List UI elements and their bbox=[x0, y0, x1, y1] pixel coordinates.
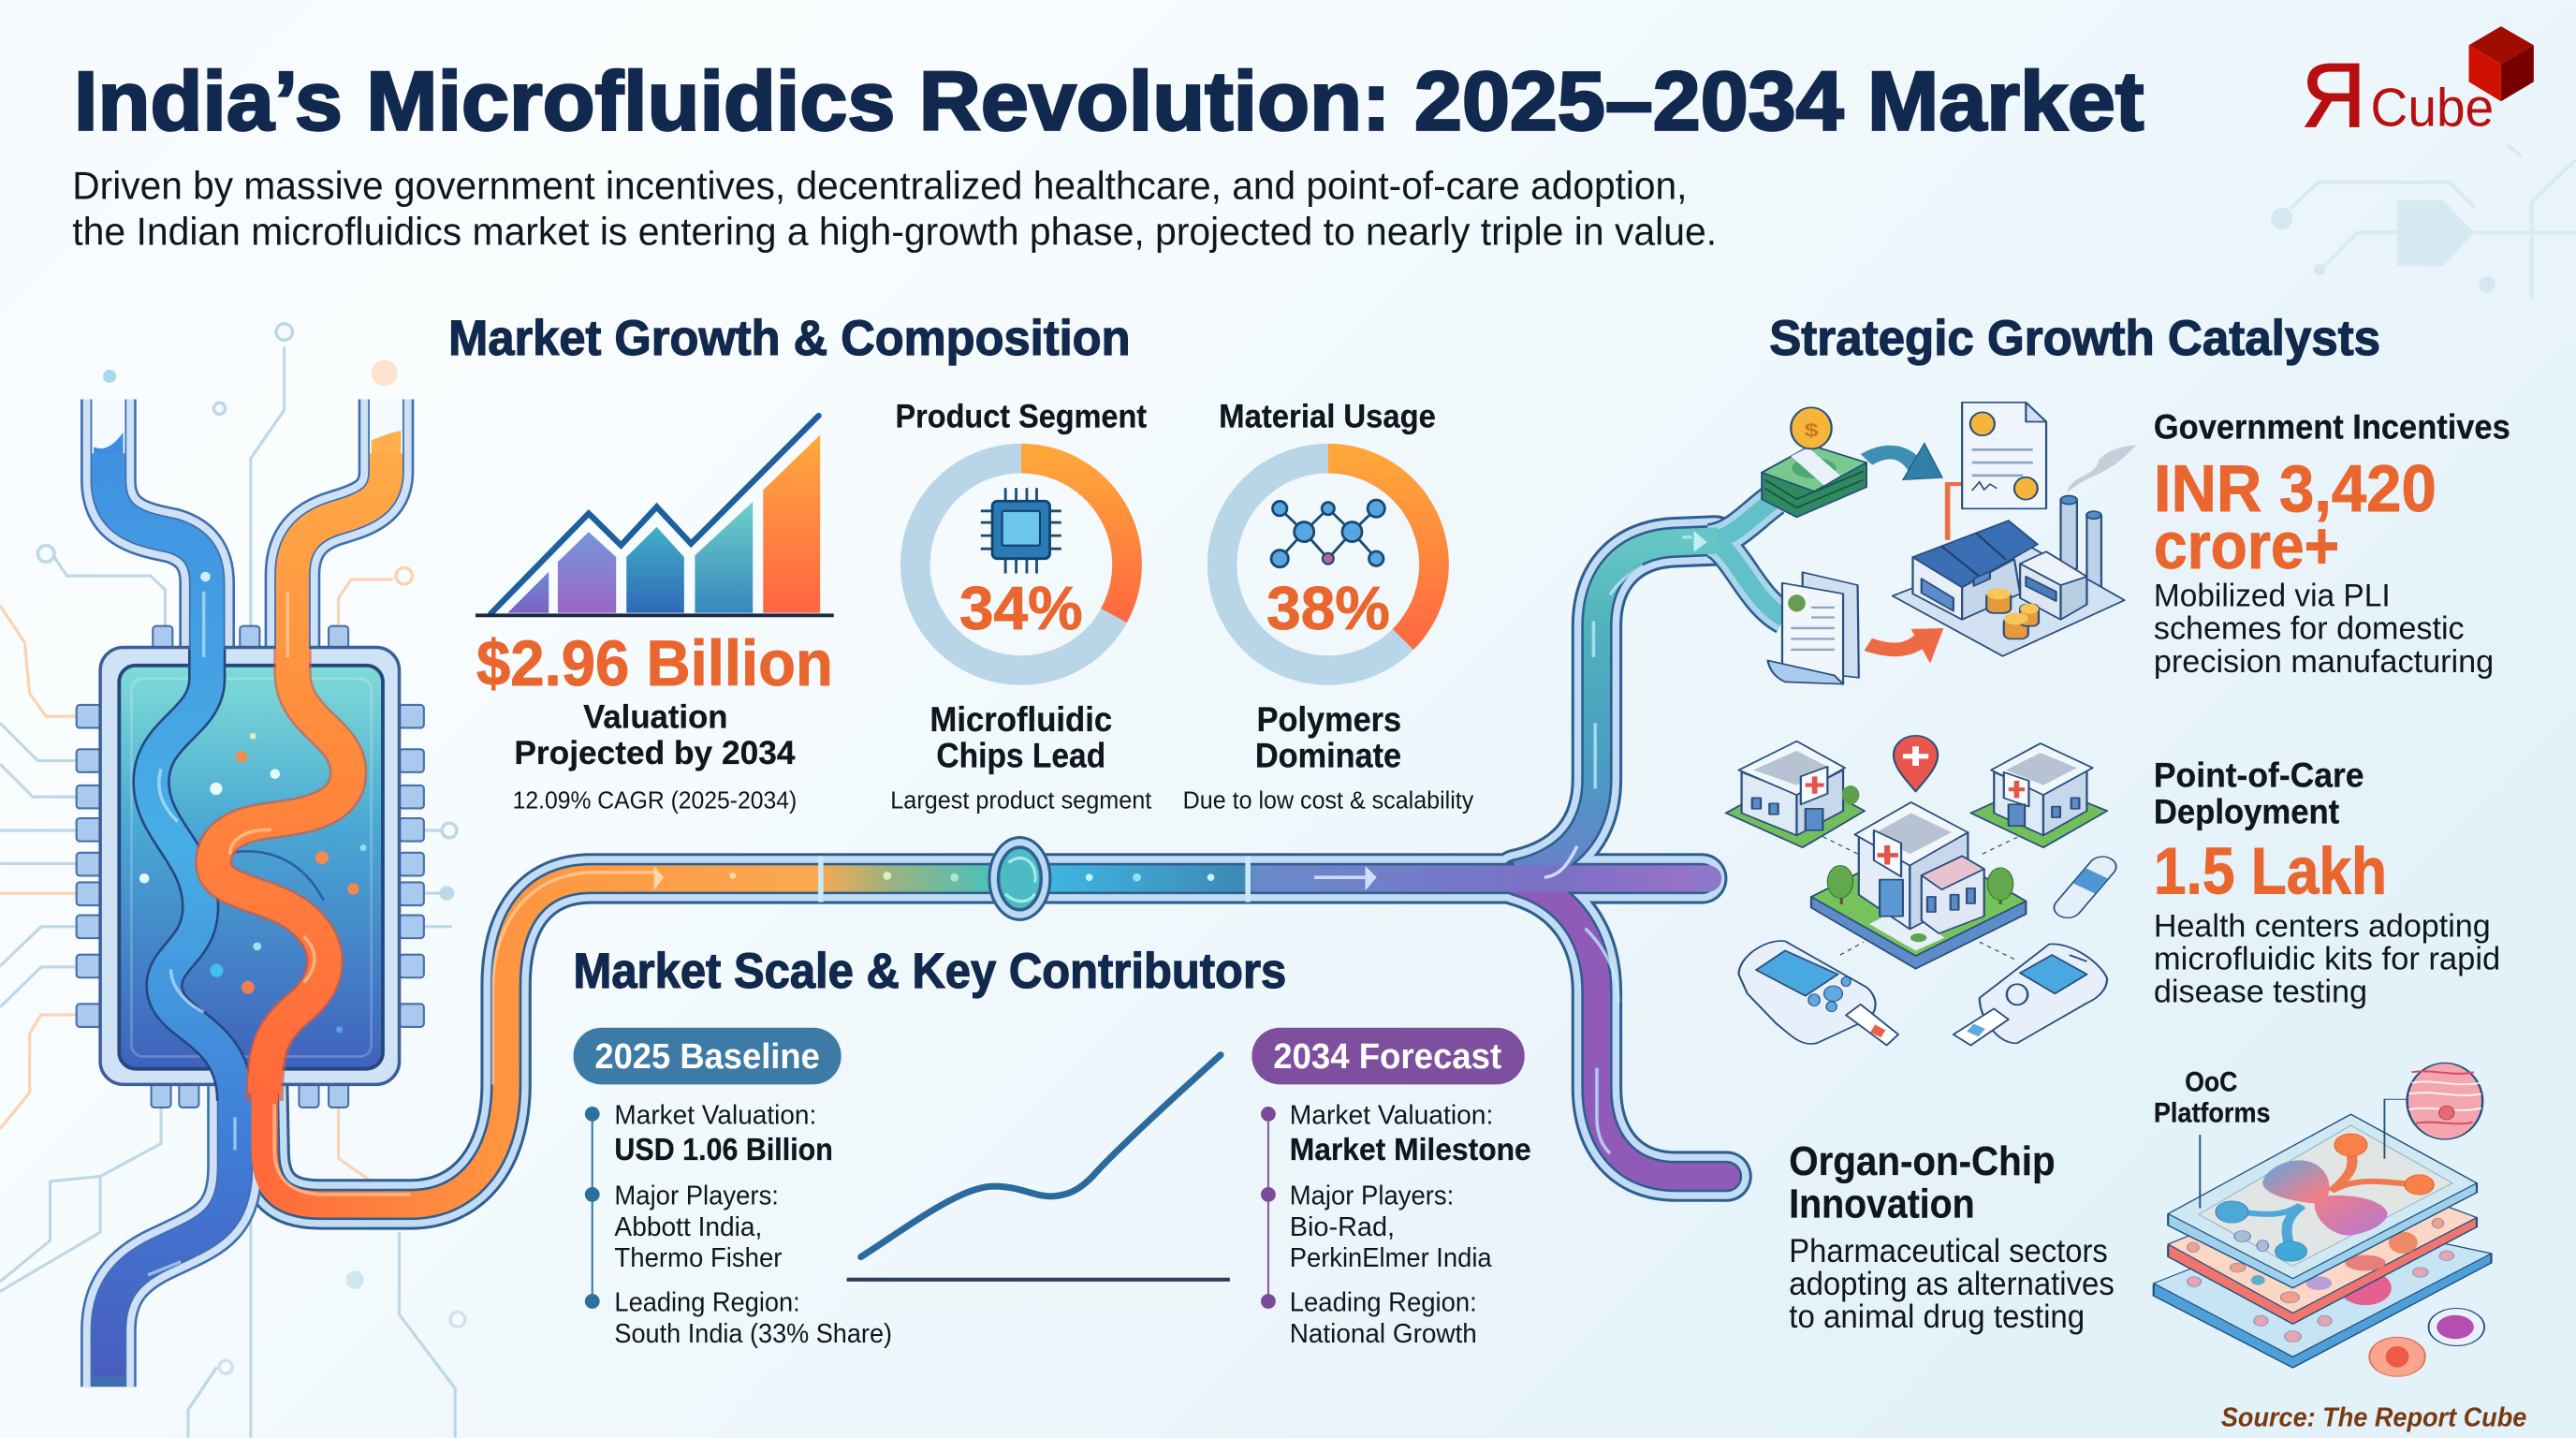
column: 2025 baseline: Leading Region: bbox=[614, 1288, 800, 1318]
right clinic bbox=[1970, 743, 2107, 847]
main channel valve and flow markers bbox=[654, 531, 1707, 1153]
subtitle: the Indian microfluidics market is entering a high-growth phase, projected to nearly triple in value. bbox=[72, 210, 1717, 253]
left inlet and outlet tubes bbox=[109, 399, 386, 1387]
text: organ-on-chip innovation: to animal drug testing bbox=[1789, 1299, 2085, 1335]
text: point-of-care deployment: disease testing bbox=[2154, 975, 2367, 1010]
text: point-of-care deployment: Point-of-Care bbox=[2154, 756, 2364, 795]
logo: Report Cube: Я bbox=[2302, 46, 2365, 146]
column: 2034 forecast: Market Valuation: bbox=[1290, 1100, 1493, 1130]
text: point-of-care deployment: Deployment bbox=[2154, 792, 2339, 830]
column: 2025 baseline: Market Valuation: bbox=[614, 1100, 816, 1130]
text: organ-on-chip innovation: Innovation bbox=[1789, 1181, 1975, 1226]
panel: market growth and composition bbox=[448, 311, 1474, 814]
icon: microchip bbox=[981, 488, 1061, 574]
column: 2034 forecast: PerkinElmer India bbox=[1290, 1243, 1492, 1273]
donut: product segment: Chips Lead bbox=[936, 737, 1105, 775]
bottom layer bbox=[2154, 1218, 2491, 1368]
label: OoC platforms: Platforms bbox=[2154, 1098, 2271, 1129]
icon: point-of-care clinics and devices illustration bbox=[1726, 736, 2107, 1045]
microfluidic chip bbox=[77, 626, 424, 1108]
column: 2034 forecast: National Growth bbox=[1290, 1319, 1477, 1349]
subtitle: Driven by massive government incentives, decentralized healthcare, and point-of-care adoption, bbox=[72, 164, 1687, 207]
donut: material usage: Due to low cost & scalability bbox=[1183, 785, 1474, 814]
label: OoC platforms bbox=[2154, 1066, 2271, 1129]
fork toward incentive icons bbox=[1708, 500, 1784, 618]
top glass layer bbox=[2168, 1114, 2477, 1288]
text: government incentives bbox=[2154, 408, 2510, 680]
left clinic bbox=[1726, 741, 1865, 847]
organ channel bbox=[2216, 1134, 2434, 1261]
column: 2025 baseline bbox=[574, 1028, 892, 1349]
column: 2025 baseline: USD 1.06 Billion bbox=[614, 1133, 833, 1167]
column: 2034 forecast: Market Milestone bbox=[1290, 1133, 1531, 1167]
column: 2025 baseline: Major Players: bbox=[614, 1181, 779, 1211]
donut: material usage: Dominate bbox=[1255, 737, 1401, 775]
middle layer bbox=[2168, 1170, 2477, 1324]
microfluidic pipe network bbox=[263, 500, 1784, 1204]
text: organ-on-chip innovation bbox=[1789, 1138, 2115, 1335]
chart: growth line bbox=[847, 1055, 1230, 1280]
logo: Report Cube bbox=[2302, 26, 2534, 146]
panel: strategic growth catalysts bbox=[1726, 311, 2526, 1432]
title: India’s Microfluidics Revolution: 2025–2034 Market bbox=[74, 54, 2144, 148]
logo: Report Cube: Cube bbox=[2371, 78, 2494, 138]
petri dishes bbox=[2369, 1308, 2484, 1376]
icon: government incentives illustration bbox=[1762, 403, 2136, 684]
subtitle bbox=[72, 164, 1717, 253]
column: 2034 forecast: Leading Region: bbox=[1290, 1288, 1477, 1318]
stat: valuation: $2.96 Billion bbox=[476, 627, 833, 699]
text: point-of-care deployment: Health centers adopting bbox=[2154, 908, 2491, 944]
text: organ-on-chip innovation: Organ-on-Chip bbox=[1789, 1138, 2056, 1184]
donut: product segment: 34% bbox=[959, 574, 1083, 642]
text: point-of-care deployment: microfluidic kits for rapid bbox=[2154, 941, 2500, 976]
text: organ-on-chip innovation: Pharmaceutical sectors bbox=[1789, 1233, 2108, 1269]
test capsule bbox=[2068, 867, 2102, 907]
text: organ-on-chip innovation: adopting as alternatives bbox=[1789, 1266, 2115, 1302]
heading: strategic catalysts: Strategic Growth Catalysts bbox=[1769, 311, 2380, 366]
tissue callout bbox=[2200, 1063, 2482, 1209]
handheld diagnostic left bbox=[1738, 941, 1898, 1045]
panel: market scale and key contributors bbox=[574, 944, 1531, 1349]
donut: material usage: 38% bbox=[1266, 574, 1390, 642]
donut: product segment: Largest product segment bbox=[890, 785, 1152, 814]
blue fluid channel bbox=[94, 433, 235, 1377]
column: 2034 forecast bbox=[1251, 1028, 1531, 1349]
handheld diagnostic right bbox=[1954, 944, 2107, 1045]
text: point-of-care deployment bbox=[2154, 756, 2500, 1010]
donut: material usage: Polymers bbox=[1257, 700, 1401, 739]
text: government incentives: Mobilized via PLI bbox=[2154, 579, 2391, 614]
source credit: Source: The Report Cube bbox=[2221, 1402, 2526, 1432]
text: government incentives: schemes for domestic bbox=[2154, 611, 2465, 647]
icon: government incentives illustration: $ bbox=[1805, 420, 1819, 442]
icon: organ-on-chip layers illustration bbox=[2154, 1063, 2491, 1376]
heading: market scale: Market Scale & Key Contributors bbox=[574, 944, 1286, 999]
text: government incentives: Government Incentives bbox=[2154, 408, 2510, 447]
column: 2034 forecast: Bio-Rad, bbox=[1290, 1212, 1395, 1242]
text: point-of-care deployment: 1.5 Lakh bbox=[2154, 834, 2387, 908]
donut: product segment bbox=[890, 398, 1152, 814]
donut: material usage bbox=[1183, 398, 1474, 814]
orange fluid channel bbox=[213, 431, 1708, 1204]
icon: polymer molecule bbox=[1271, 500, 1384, 567]
stat: valuation: Projected by 2034 bbox=[514, 735, 796, 771]
chart: rising area bars bbox=[476, 416, 834, 615]
column: 2025 baseline: South India (33% Share) bbox=[614, 1319, 892, 1349]
donut: product segment: Microfluidic bbox=[929, 700, 1112, 739]
column: 2025 baseline: Thermo Fisher bbox=[614, 1243, 783, 1273]
donut: product segment: Product Segment bbox=[896, 398, 1147, 434]
stat: valuation: 12.09% CAGR (2025-2034) bbox=[513, 785, 797, 814]
map pin bbox=[1894, 736, 1938, 791]
central health center bbox=[1811, 802, 2026, 969]
stat: valuation bbox=[476, 627, 833, 814]
heading: market growth: Market Growth & Composition bbox=[448, 311, 1131, 366]
text: government incentives: precision manufacturing bbox=[2154, 644, 2494, 680]
label: OoC platforms: OoC bbox=[2185, 1066, 2237, 1097]
column: 2034 forecast: 2034 Forecast bbox=[1273, 1036, 1502, 1076]
column: 2025 baseline: Abbott India, bbox=[614, 1212, 762, 1242]
text: government incentives: INR 3,420 bbox=[2154, 451, 2437, 525]
column: 2034 forecast: Major Players: bbox=[1290, 1181, 1454, 1211]
donut: material usage: Material Usage bbox=[1219, 398, 1436, 434]
text: government incentives: crore+ bbox=[2154, 508, 2339, 582]
column: 2025 baseline: 2025 Baseline bbox=[594, 1036, 820, 1076]
stat: valuation: Valuation bbox=[583, 698, 728, 735]
